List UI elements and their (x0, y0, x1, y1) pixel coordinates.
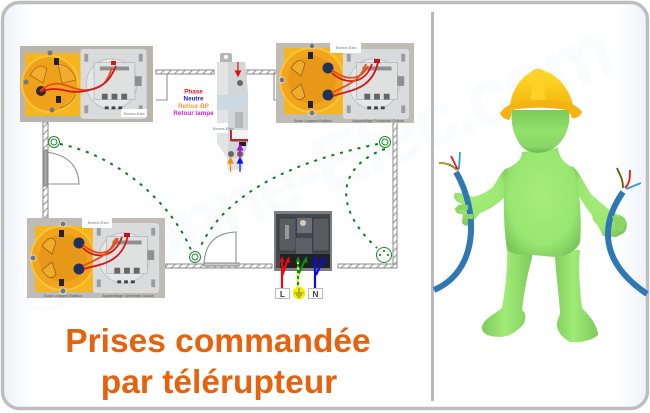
box 1: socket and switch photo (20, 46, 153, 122)
doors (44, 74, 277, 266)
right fingers (612, 216, 627, 232)
title: par télérupteur (101, 364, 337, 401)
dotted wiring (60, 144, 385, 250)
right cable wires (617, 168, 641, 189)
right leg (553, 250, 598, 342)
wire colour legend: Retour BP (178, 103, 209, 110)
caption text: Socle Legrand Batibox (44, 294, 82, 298)
watermark: © Bonne-Elec.com (2, 5, 626, 336)
figure: electrician holding cables (434, 69, 647, 342)
wire colour legend: Retour lampe (173, 110, 214, 117)
box 2: socket and switch photo (276, 43, 414, 123)
title (65, 323, 371, 401)
arrow: retour lampe (238, 145, 242, 158)
arrow: phase (236, 62, 240, 76)
caption text: Appareillage Schneider Odace (102, 294, 154, 298)
left arm (454, 168, 509, 226)
logo text: Bonne-Elec (88, 220, 109, 225)
light point symbols (48, 136, 390, 262)
wire colour legend (173, 88, 214, 117)
logo text: Bonne-Elec (213, 126, 234, 131)
arrows to terminals (282, 260, 323, 288)
caption text: Appareillage Schneider Odace (352, 119, 404, 123)
arrow heads (280, 256, 325, 263)
right cable (608, 192, 647, 294)
left fingers (458, 205, 473, 219)
box 3: socket and switch photo (27, 218, 165, 298)
left leg (482, 240, 534, 337)
terminal earth (293, 287, 305, 299)
panel divider (431, 12, 434, 401)
terminal N: N (312, 289, 319, 299)
terminal L: L (280, 289, 285, 299)
right arm (572, 166, 627, 237)
arrow: retour BP (228, 158, 233, 172)
logo text: Bonne-Elec (336, 45, 357, 50)
title: Prises commandée (65, 323, 371, 360)
walls (43, 70, 397, 268)
caption text: Socle Legrand Batibox (294, 119, 332, 123)
torso (504, 148, 581, 257)
socket back photo with terminals (274, 211, 332, 299)
hard hat (500, 69, 582, 120)
head (511, 110, 569, 153)
floor plan (43, 70, 397, 268)
left cable (434, 172, 471, 290)
left cable wires (439, 152, 460, 170)
arrow: neutre (238, 158, 242, 172)
wire colour legend: Phase (184, 88, 203, 96)
logo text: Bonne-Elec (124, 111, 145, 116)
socket symbol (376, 248, 392, 262)
wire colour legend: Neutre (184, 96, 204, 102)
remote switch module (206, 53, 248, 172)
